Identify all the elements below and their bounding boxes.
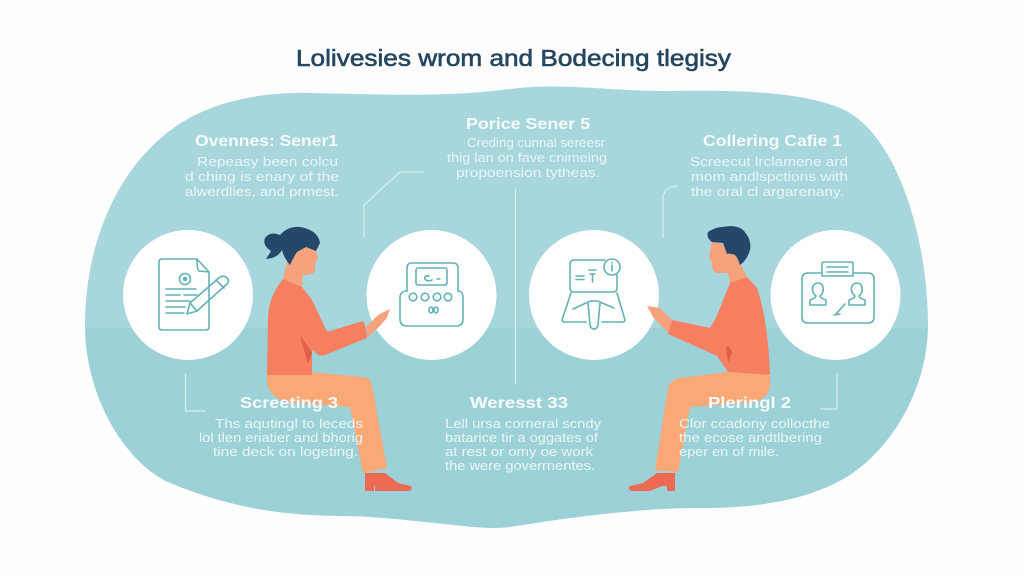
text block: bottom right: eper en of mile. [679,445,779,459]
text block: top centre: Porice Sener 5 [466,116,590,133]
text block: bottom centre: the were goverrnentes. [445,459,595,473]
text block: top right [690,133,848,199]
text block: top centre: thig lan on fave cnimeing [447,151,607,165]
panel: document icon circle [123,230,253,360]
text block: bottom right [679,395,830,459]
background blob panel [60,80,960,538]
hand [366,309,390,337]
text block: top left: alwerdlies, and prmest. [185,185,339,199]
icon: people card [802,262,874,323]
connector lines [186,172,837,411]
arm [291,300,367,356]
torso [706,277,770,375]
shoe [629,473,675,491]
text block: bottom left [199,395,363,459]
text block: top right: mom andlspctions with [691,170,848,184]
text block: bottom right: Pleringl 2 [708,395,791,412]
text block: bottom right: the ecose andtlbering [679,431,822,445]
torso [267,279,327,375]
text block: bottom left: Screeting 3 [240,395,338,412]
text block: bottom centre: Lell ursa corneral scndy [445,417,602,431]
text block: bottom right: Clor ccadony collocthe [679,417,830,431]
arm shadow [300,335,312,364]
icon: keypad device [400,263,463,326]
text block: top left: d ching is enary of the [185,170,339,184]
text block: bottom left: Ths aqutingl to leceds [215,417,363,431]
neck and face [709,241,747,284]
text block: bottom centre: at rest or omy oe work [445,445,594,459]
text block: bottom left: tine deck on logeting. [213,445,358,459]
panel: monitor icon circle [529,230,659,360]
panel: people card icon circle [770,230,900,360]
text block: top left [185,133,339,199]
text block: top right: Collering Cafie 1 [703,133,842,150]
text block: top right: Screecut lrclamene ard [690,155,848,169]
figure: woman seated [264,227,412,491]
leg [267,372,387,473]
text block: bottom centre [445,395,602,473]
shoe [365,473,412,491]
text block: top centre: propoension tytheas. [456,166,600,180]
icon: document and pencil [159,259,228,330]
text block: top centre [447,116,607,180]
title: Lolivesies wrom and Bodecing tlegisy [296,45,732,71]
text block: top left: Repeasy been colcu [197,155,338,169]
text block: bottom centre: batarice tir a oggates of [445,431,599,445]
leg [655,372,770,472]
text block: bottom centre: Weresst 33 [470,395,568,412]
hair [708,226,750,265]
text block: bottom left: lol tlen eriatier and bhorig [199,431,363,445]
hand [647,306,672,333]
icon: monitor with info badge [562,259,625,329]
hair and bun [264,227,320,265]
arm shadow [725,340,732,363]
neck and face [283,238,318,287]
text block: top centre: Creding cunnal sereesr [467,136,605,150]
text block: top left: Ovennes: Sener1 [195,133,338,150]
arm [668,290,746,355]
text block: top right: the oral cl argarenany. [691,185,844,199]
panel: keypad device icon circle [366,230,496,360]
figure: man seated [629,226,770,491]
